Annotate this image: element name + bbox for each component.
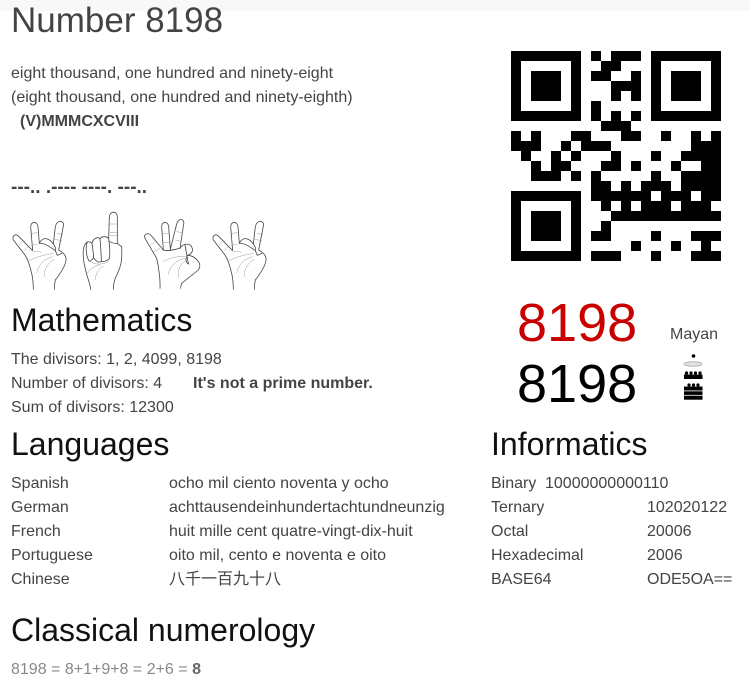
chinese row: Chinese <box>11 571 70 588</box>
german row: German <box>11 499 69 516</box>
heading: informatics: Informatics <box>491 426 647 462</box>
icon: hand sign 8 <box>13 221 66 289</box>
french row: French <box>11 523 61 540</box>
french row <box>11 523 413 540</box>
heading: languages: Languages <box>11 426 169 462</box>
spanish row: ocho mil ciento noventa y ocho <box>169 475 389 492</box>
hexadecimal row <box>491 547 683 564</box>
ordinal name: (eight thousand, one hundred and ninety-eighth) <box>11 89 353 106</box>
binary row: 10000000000110 <box>545 475 668 492</box>
mayan top dot <box>692 354 695 358</box>
portuguese row <box>11 547 386 564</box>
german row <box>11 499 445 516</box>
binary row <box>491 475 668 492</box>
chinese row <box>11 570 281 588</box>
octal row <box>491 523 692 540</box>
QR data modules <box>511 51 721 261</box>
spanish row <box>11 475 389 492</box>
mayan label: Mayan <box>670 326 718 343</box>
base64 row <box>491 571 732 588</box>
icon: hand sign 8 repeated <box>213 221 266 289</box>
panel: informatics table <box>491 475 732 588</box>
icon: hand sign 9 <box>145 219 200 288</box>
QR finder pattern top left <box>511 51 581 121</box>
sum of divisors: Sum of divisors: 12300 <box>11 399 174 416</box>
spanish row: Spanish <box>11 475 69 492</box>
mayan four dots and bar <box>684 371 702 379</box>
prime note: It's not a prime number. <box>193 375 373 392</box>
chinese row: 八千一百九十八 <box>169 571 281 588</box>
number names and roman numeral <box>11 65 353 130</box>
title: Number 8198 <box>11 1 223 40</box>
QR code <box>511 51 721 261</box>
heading: mathematics: Mathematics <box>11 302 192 338</box>
red number 8198: 8198 <box>517 293 637 353</box>
octal row: 20006 <box>647 523 692 540</box>
QR finder pattern top right <box>651 51 721 121</box>
octal row: Octal <box>491 523 528 540</box>
cardinal name: eight thousand, one hundred and ninety-eight <box>11 65 333 82</box>
binary row: Binary <box>491 475 536 492</box>
portuguese row: Portuguese <box>11 547 93 564</box>
number of divisors: Number of divisors: 4 <box>11 375 162 392</box>
hexadecimal row: Hexadecimal <box>491 547 583 564</box>
black number 8198: 8198 <box>517 354 637 414</box>
mayan shell zero <box>684 362 702 366</box>
panel: languages table <box>11 475 445 588</box>
panel: mathematics facts <box>11 351 373 416</box>
french row: huit mille cent quatre-vingt-dix-huit <box>169 523 413 540</box>
icon: mayan numeral <box>684 354 702 400</box>
ternary row: Ternary <box>491 499 544 516</box>
base64 row: ODE5OA== <box>647 571 732 588</box>
morse code: ---.. .---- ----. ---.. <box>11 177 147 198</box>
heading: classical numerology: Classical numerology <box>11 612 315 648</box>
sign language hands <box>12 212 266 290</box>
divisors: The divisors: 1, 2, 4099, 8198 <box>11 351 222 368</box>
base64 row: BASE64 <box>491 571 551 588</box>
ternary row: 102020122 <box>647 499 727 516</box>
ternary row <box>491 499 727 516</box>
roman numeral: (V)MMMCXCVIII <box>20 113 139 130</box>
portuguese row: oito mil, cento e noventa e oito <box>169 547 386 564</box>
hexadecimal row: 2006 <box>647 547 683 564</box>
icon: hand sign 1 <box>83 212 122 289</box>
QR finder pattern bottom left <box>511 191 581 261</box>
german row: achttausendeinhundertachtundneunzig <box>169 499 445 516</box>
numerology calculation: 8198 = 8+1+9+8 = 2+6 = 8 <box>11 661 201 678</box>
mayan three dots and three bars <box>684 383 702 400</box>
